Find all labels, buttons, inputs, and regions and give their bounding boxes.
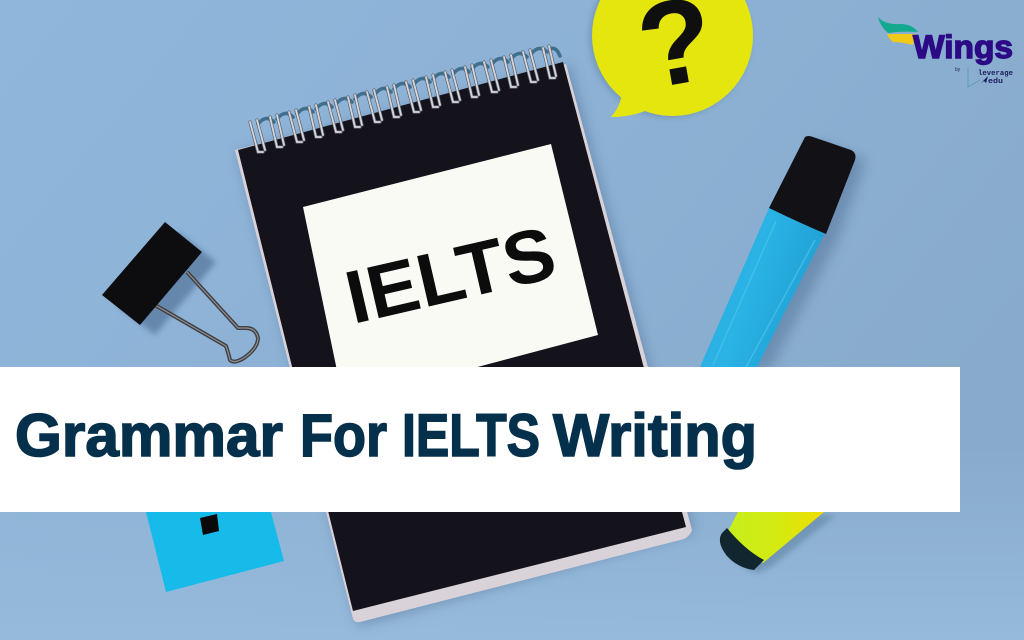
logo divider — [968, 68, 980, 87]
title text: For — [300, 402, 387, 469]
logo teal wing — [878, 17, 918, 33]
speech bubble with question mark — [589, 0, 753, 118]
logo leverage edu — [978, 70, 1013, 86]
Wings logo — [878, 17, 1013, 87]
title band — [0, 367, 960, 512]
page stack — [235, 64, 692, 622]
blue sticky note — [146, 512, 284, 592]
spiral binding — [250, 46, 560, 152]
title text: Writing — [553, 402, 757, 469]
title text: IELTS — [402, 402, 540, 469]
notebook — [235, 46, 694, 626]
exclamation dot — [200, 514, 219, 535]
pen tip — [727, 515, 836, 573]
highlighter pen — [700, 136, 866, 573]
clip black body — [102, 222, 202, 325]
clip wire handles — [155, 272, 258, 362]
logo by: by — [955, 67, 961, 73]
IELTS card — [303, 144, 598, 385]
logo wordmark: Wings — [913, 29, 1013, 65]
title text: Grammar — [15, 402, 283, 469]
pen shadow — [715, 140, 866, 370]
binder clip — [102, 222, 258, 362]
logo leverage edu: edu — [988, 78, 1003, 86]
black cover — [238, 62, 686, 611]
title text — [15, 402, 757, 469]
notebook shadow — [238, 66, 694, 626]
pen cap — [769, 136, 856, 234]
IELTS card: IELTS — [338, 210, 563, 340]
logo yellow wing — [887, 34, 915, 45]
logo leverage edu: leverage — [978, 70, 1013, 78]
pen body — [700, 208, 825, 367]
